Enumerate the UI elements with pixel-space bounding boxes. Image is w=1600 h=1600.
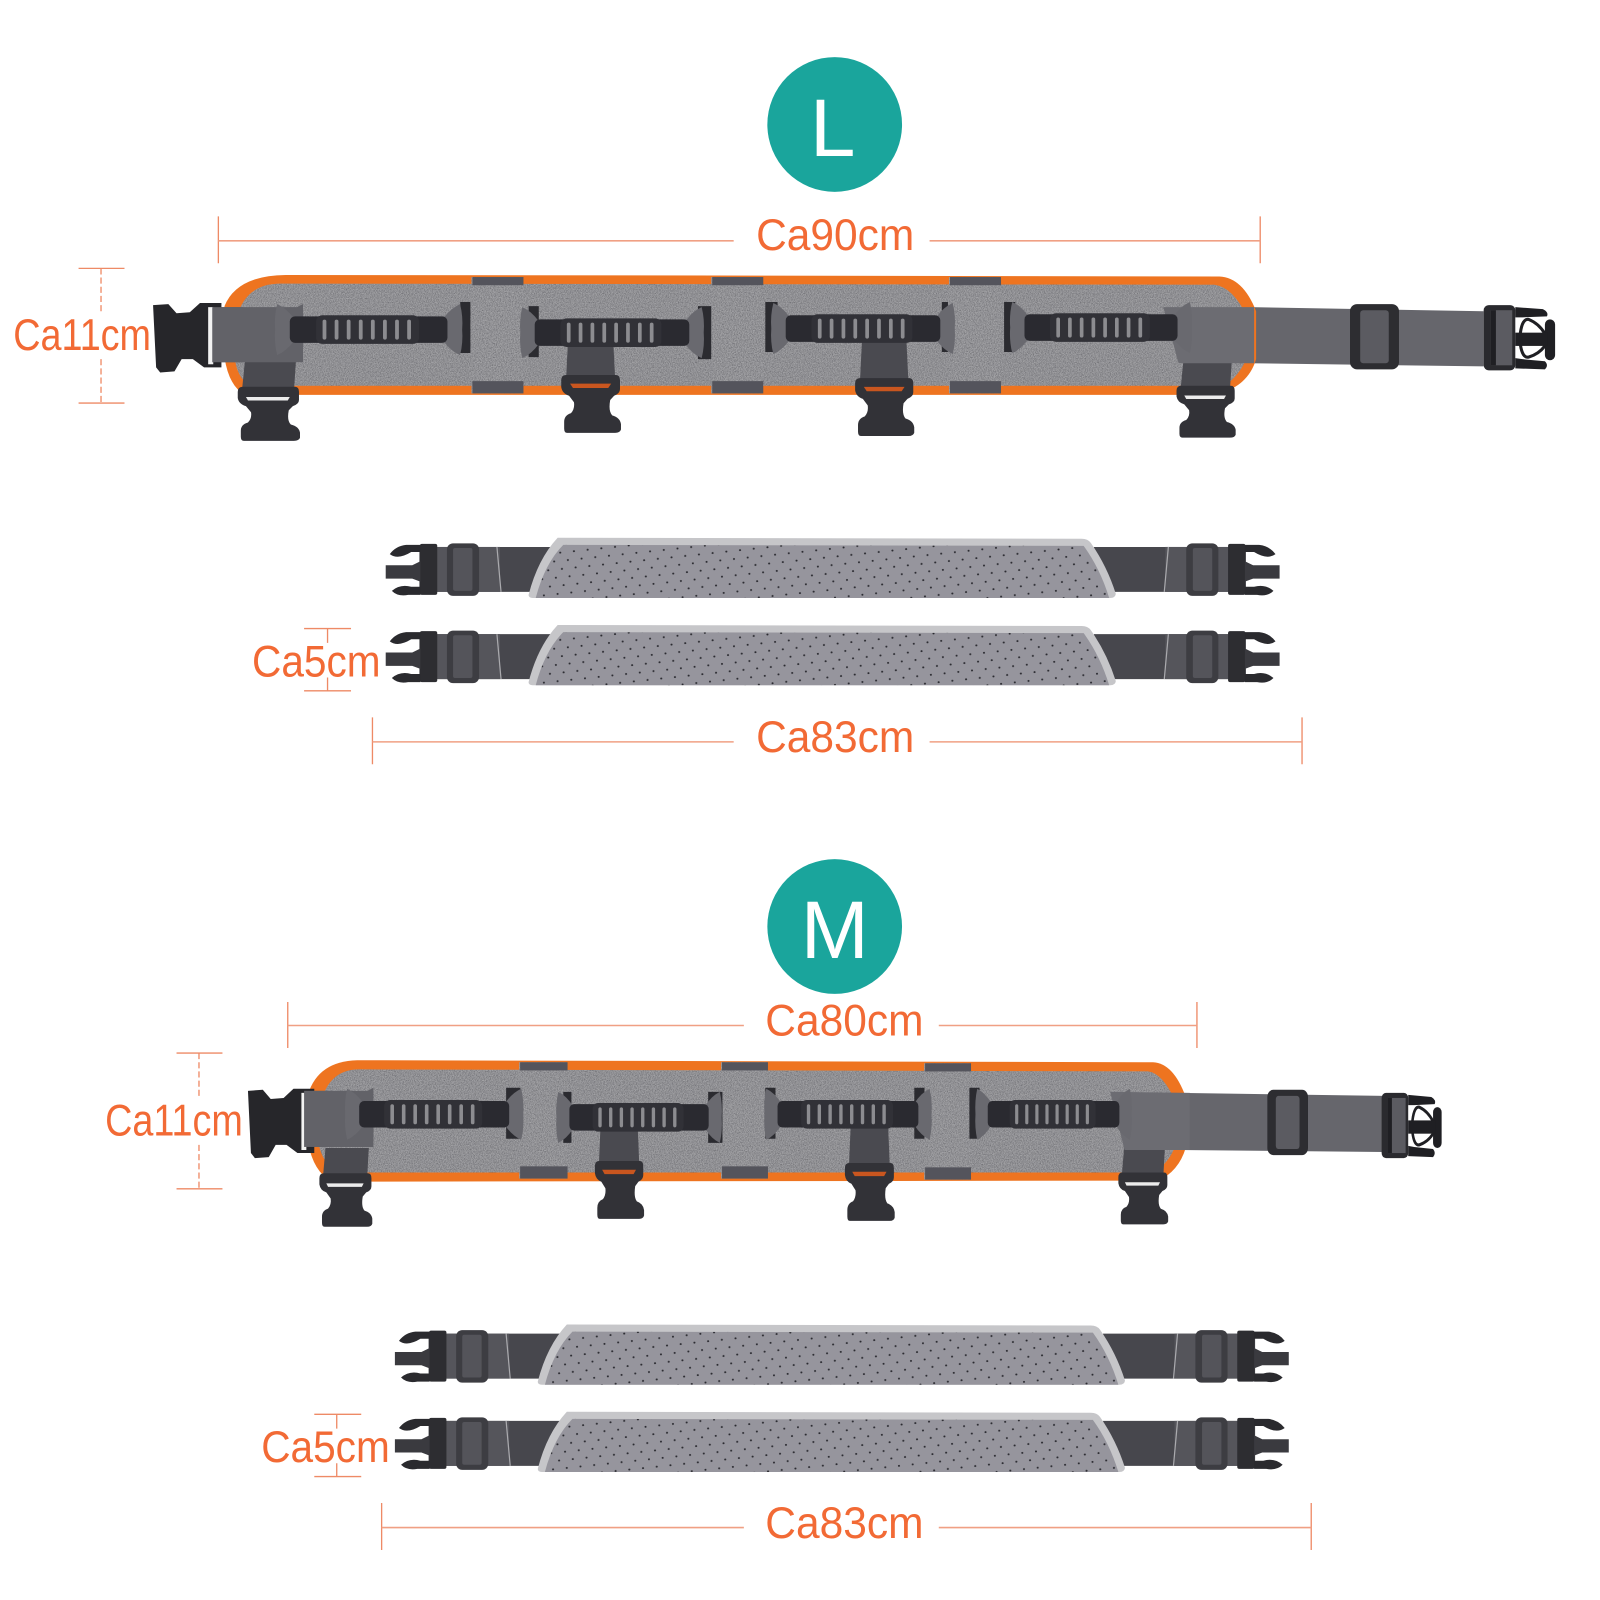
wing shadows xyxy=(460,302,1015,359)
dimension: strap length Ca83cm xyxy=(372,711,1302,764)
right webbing xyxy=(1110,1092,1190,1150)
cross bands xyxy=(519,1062,971,1180)
padded straps L xyxy=(386,538,1280,685)
dimension: belt length Ca80cm xyxy=(288,995,1197,1048)
dimension: belt height Ca11cm xyxy=(13,268,151,403)
padded straps M xyxy=(395,1324,1289,1472)
dimension: strap height Ca5cm: Ca5cm xyxy=(261,1421,390,1472)
dimension: strap length Ca83cm xyxy=(382,1497,1311,1550)
right end buckle xyxy=(1484,305,1555,370)
right webbing xyxy=(1163,307,1254,363)
dimension: belt height Ca11cm xyxy=(105,1053,243,1189)
dimension: belt length Ca90cm: Ca90cm xyxy=(756,209,914,260)
strap slider xyxy=(1350,304,1399,369)
right strap xyxy=(1179,1093,1384,1152)
dimension: strap length Ca83cm: Ca83cm xyxy=(756,711,914,762)
handles xyxy=(345,1089,1132,1143)
cross bands xyxy=(471,277,1001,393)
left main buckle xyxy=(153,303,221,372)
right strap xyxy=(1250,307,1484,366)
grey fabric xyxy=(318,1069,1176,1172)
dimension: belt length Ca90cm xyxy=(218,209,1260,263)
size badge: M: M xyxy=(801,885,869,976)
size badge: L xyxy=(767,57,902,192)
left main buckle xyxy=(248,1089,314,1158)
strap slider xyxy=(1267,1090,1308,1155)
lower buckles xyxy=(238,339,1236,441)
left webbing xyxy=(304,1088,373,1147)
right end buckle xyxy=(1382,1093,1442,1158)
padded body with orange trim xyxy=(308,1060,1186,1182)
dimension: belt height Ca11cm: Ca11cm xyxy=(105,1095,243,1146)
left webbing xyxy=(212,304,303,362)
dimension: strap height Ca5cm: Ca5cm xyxy=(252,636,381,687)
size badge: M xyxy=(767,859,902,994)
size badge: L: L xyxy=(810,83,855,174)
dimension: belt height Ca11cm: Ca11cm xyxy=(13,309,151,360)
padded body with orange trim xyxy=(224,275,1256,395)
wing shadows xyxy=(506,1088,980,1143)
lower buckles xyxy=(319,1125,1168,1227)
belt L xyxy=(153,275,1555,441)
dimension: belt length Ca80cm: Ca80cm xyxy=(765,995,923,1046)
left webbing end xyxy=(304,1091,335,1147)
dimension: strap length Ca83cm: Ca83cm xyxy=(765,1497,923,1548)
handles xyxy=(275,302,1192,358)
belt M xyxy=(248,1060,1442,1227)
grey fabric xyxy=(235,284,1247,386)
left webbing end xyxy=(212,307,243,362)
